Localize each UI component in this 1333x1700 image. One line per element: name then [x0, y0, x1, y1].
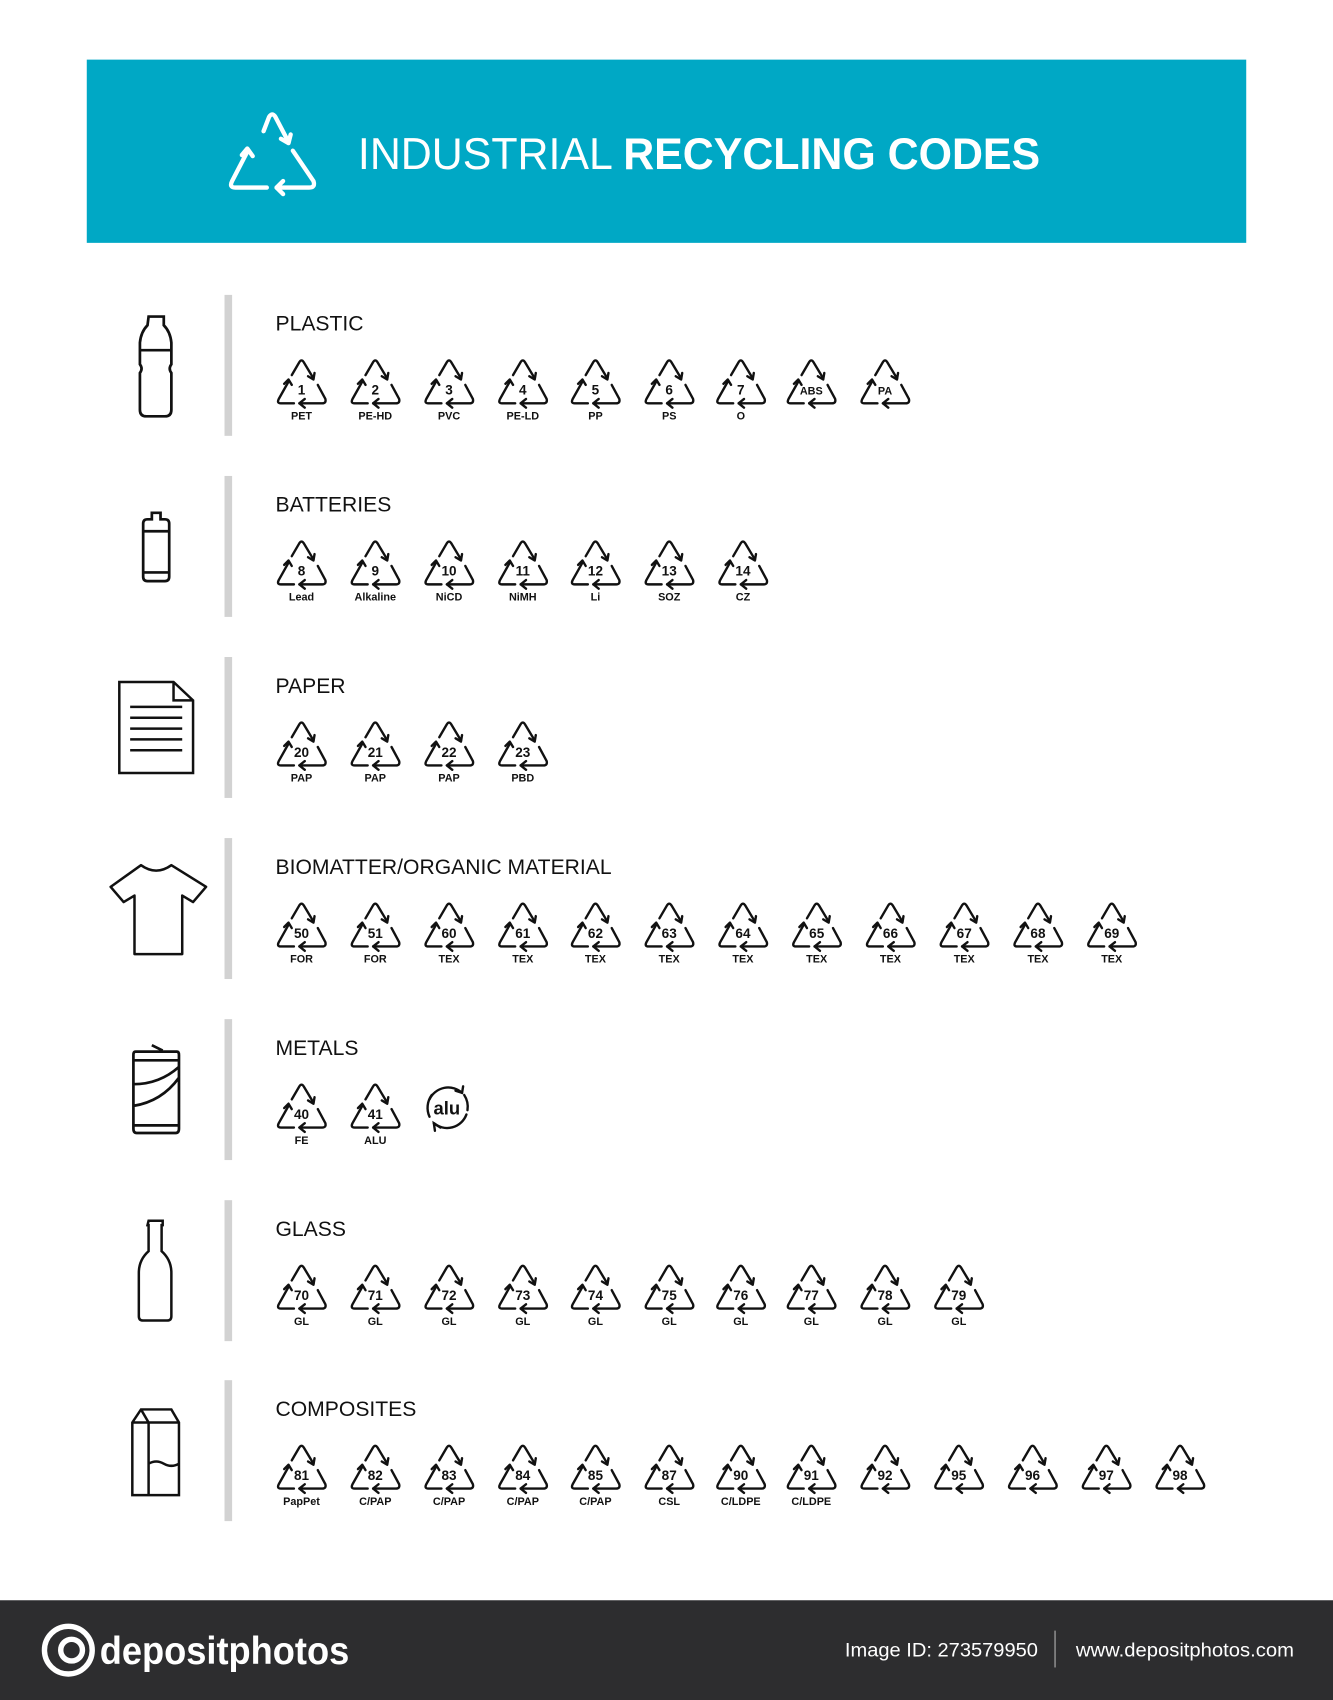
codes: glass: GL	[804, 1316, 819, 1328]
codes: glass: 70	[294, 1288, 309, 1303]
codes: plastic: ABS	[800, 386, 823, 398]
codes: paper: 23	[515, 745, 531, 760]
codes: batteries: 12	[588, 564, 603, 579]
codes: metals: ALU	[364, 1135, 387, 1147]
codes: composites: 96	[1025, 1468, 1041, 1483]
icon: glass bottle	[139, 1221, 171, 1321]
codes: batteries: Lead	[289, 592, 314, 604]
codes: batteries: CZ	[736, 592, 751, 604]
codes: paper: 21	[368, 745, 383, 760]
codes: glass: GL	[878, 1316, 893, 1328]
codes: plastic: 1	[298, 383, 306, 398]
codes: biomatter: 67	[957, 926, 972, 941]
codes: biomatter: 60	[441, 926, 457, 941]
icon: alu circle: alu	[434, 1098, 460, 1119]
codes: glass: 76	[733, 1288, 749, 1303]
codes: composites: C/PAP	[579, 1496, 612, 1508]
codes: paper: PAP	[438, 773, 460, 785]
codes: batteries: 11	[516, 564, 530, 579]
codes: plastic: 7	[737, 383, 745, 398]
codes: plastic: 2	[372, 383, 379, 398]
codes: biomatter: 69	[1104, 926, 1120, 941]
codes: glass: 75	[662, 1288, 677, 1303]
codes: metals: 41	[368, 1107, 383, 1122]
codes: glass: 74	[588, 1288, 603, 1303]
icon: depositphotos logo	[44, 1626, 92, 1674]
icon: plastic bottle	[140, 317, 171, 416]
codes: biomatter: TEX	[732, 954, 754, 966]
section: batteries	[143, 476, 767, 617]
codes: plastic: PA	[878, 386, 892, 398]
codes: composites: 98	[1173, 1468, 1188, 1483]
codes: glass: 71	[368, 1288, 383, 1303]
codes: plastic: 3	[445, 383, 453, 398]
header banner	[87, 60, 1246, 243]
codes: glass: GL	[951, 1316, 967, 1328]
codes: glass: 79	[951, 1288, 967, 1303]
codes: batteries: NiMH	[509, 592, 537, 604]
footer logo text: depositphotos	[100, 1630, 349, 1673]
codes: glass: GL	[368, 1316, 383, 1328]
codes: composites: 87	[662, 1468, 677, 1483]
codes: glass: 78	[878, 1288, 893, 1303]
section: metals	[133, 1019, 468, 1160]
codes: paper: 22	[441, 745, 457, 760]
codes: batteries	[278, 542, 767, 604]
codes: composites: C/PAP	[507, 1496, 539, 1508]
codes: glass: GL	[733, 1316, 749, 1328]
codes: biomatter: TEX	[585, 954, 607, 966]
heading: plastic: PLASTIC	[275, 313, 364, 336]
codes: biomatter: 66	[883, 926, 898, 941]
codes: composites: PapPet	[283, 1496, 320, 1508]
codes: composites: 91	[804, 1468, 819, 1483]
codes: batteries: SOZ	[658, 592, 681, 604]
heading: composites: COMPOSITES	[275, 1398, 416, 1421]
codes: composites: C/PAP	[359, 1496, 391, 1508]
icon: battery	[143, 513, 169, 581]
codes: glass: 72	[441, 1288, 457, 1303]
heading: glass: GLASS	[275, 1218, 346, 1241]
codes: biomatter: 51	[368, 926, 383, 941]
heading: batteries: BATTERIES	[275, 494, 391, 517]
codes: plastic: PE-LD	[507, 411, 539, 423]
codes: plastic: 5	[592, 383, 600, 398]
codes: composites: 85	[588, 1468, 603, 1483]
codes: biomatter: TEX	[954, 954, 976, 966]
codes: composites: C/LDPE	[721, 1496, 761, 1508]
codes: paper: PAP	[365, 773, 386, 785]
codes: glass	[278, 1266, 983, 1328]
codes: glass: GL	[662, 1316, 677, 1328]
codes: paper: PAP	[291, 773, 312, 785]
codes: plastic: PET	[291, 411, 312, 423]
title: INDUSTRIAL RECYCLING CODES	[358, 130, 1040, 179]
codes: biomatter: TEX	[438, 954, 460, 966]
codes: glass: 73	[515, 1288, 531, 1303]
codes: composites: 83	[441, 1468, 457, 1483]
section: plastic	[140, 295, 909, 436]
codes: batteries: 13	[662, 564, 677, 579]
codes: biomatter: FOR	[290, 954, 313, 966]
codes: biomatter: TEX	[659, 954, 681, 966]
heading: biomatter: BIOMATTER/ORGANIC MATERIAL	[275, 856, 612, 879]
codes: plastic: 6	[665, 383, 673, 398]
codes: biomatter: 64	[735, 926, 751, 941]
codes: plastic: 4	[519, 383, 527, 398]
codes: composites: C/PAP	[433, 1496, 465, 1508]
codes: metals: FE	[295, 1135, 308, 1147]
codes: biomatter: 65	[809, 926, 825, 941]
codes: composites: 95	[951, 1468, 967, 1483]
codes: plastic: PP	[588, 411, 603, 423]
codes: composites: 82	[368, 1468, 383, 1483]
codes: plastic	[278, 360, 909, 423]
codes: biomatter: TEX	[512, 954, 534, 966]
codes: batteries: NiCD	[436, 592, 462, 604]
codes: metals	[278, 1085, 468, 1147]
codes: biomatter	[278, 904, 1136, 966]
codes: batteries: 9	[372, 564, 380, 579]
codes: glass: GL	[588, 1316, 603, 1328]
section: composites	[132, 1380, 1204, 1521]
codes: biomatter: FOR	[364, 954, 387, 966]
codes: composites: 92	[878, 1468, 893, 1483]
icon: t-shirt	[111, 865, 206, 954]
icon: recycle triangle header	[231, 114, 314, 194]
codes: batteries: Alkaline	[355, 592, 396, 604]
codes: composites: 84	[515, 1468, 531, 1483]
codes: biomatter: TEX	[1101, 954, 1123, 966]
codes: composites: 97	[1099, 1468, 1114, 1483]
footer url: www.depositphotos.com	[1075, 1640, 1294, 1662]
codes: glass: GL	[515, 1316, 531, 1328]
section: biomatter	[111, 838, 1136, 979]
codes: batteries: 14	[735, 564, 751, 579]
footer bar	[0, 1600, 1333, 1700]
codes: paper	[278, 723, 547, 785]
codes: paper: 20	[294, 745, 309, 760]
codes: biomatter: 62	[588, 926, 603, 941]
codes: batteries: 8	[298, 564, 306, 579]
codes: composites: 81	[294, 1468, 310, 1483]
codes: batteries: 10	[441, 564, 457, 579]
icon: alu circle	[428, 1086, 468, 1131]
icon: carton	[132, 1409, 179, 1495]
codes: metals: 40	[294, 1107, 309, 1122]
codes: plastic: PVC	[438, 411, 460, 423]
codes: biomatter: 61	[515, 926, 531, 941]
footer image id: Image ID: 273579950	[845, 1640, 1038, 1662]
codes: plastic: PE-HD	[358, 411, 392, 423]
codes: paper: PBD	[511, 773, 534, 785]
codes: batteries: Li	[591, 592, 600, 604]
codes: biomatter: 68	[1030, 926, 1046, 941]
icon: can	[133, 1045, 179, 1133]
codes: glass: GL	[294, 1316, 309, 1328]
codes: composites	[278, 1446, 1204, 1508]
section: glass	[139, 1200, 983, 1341]
codes: composites: C/LDPE	[791, 1496, 831, 1508]
codes: composites: 90	[733, 1468, 748, 1483]
heading: paper: PAPER	[275, 675, 346, 698]
section: paper	[119, 657, 547, 798]
codes: biomatter: TEX	[806, 954, 828, 966]
codes: biomatter: TEX	[880, 954, 902, 966]
heading: metals: METALS	[275, 1037, 358, 1060]
codes: glass: GL	[442, 1316, 457, 1328]
codes: plastic: PS	[662, 411, 676, 423]
codes: biomatter: 50	[294, 926, 309, 941]
codes: biomatter: 63	[662, 926, 677, 941]
icon: paper sheet	[119, 682, 193, 773]
codes: biomatter: TEX	[1027, 954, 1049, 966]
codes: composites: CSL	[658, 1496, 680, 1508]
codes: glass: 77	[804, 1288, 819, 1303]
codes: plastic: O	[737, 411, 745, 423]
